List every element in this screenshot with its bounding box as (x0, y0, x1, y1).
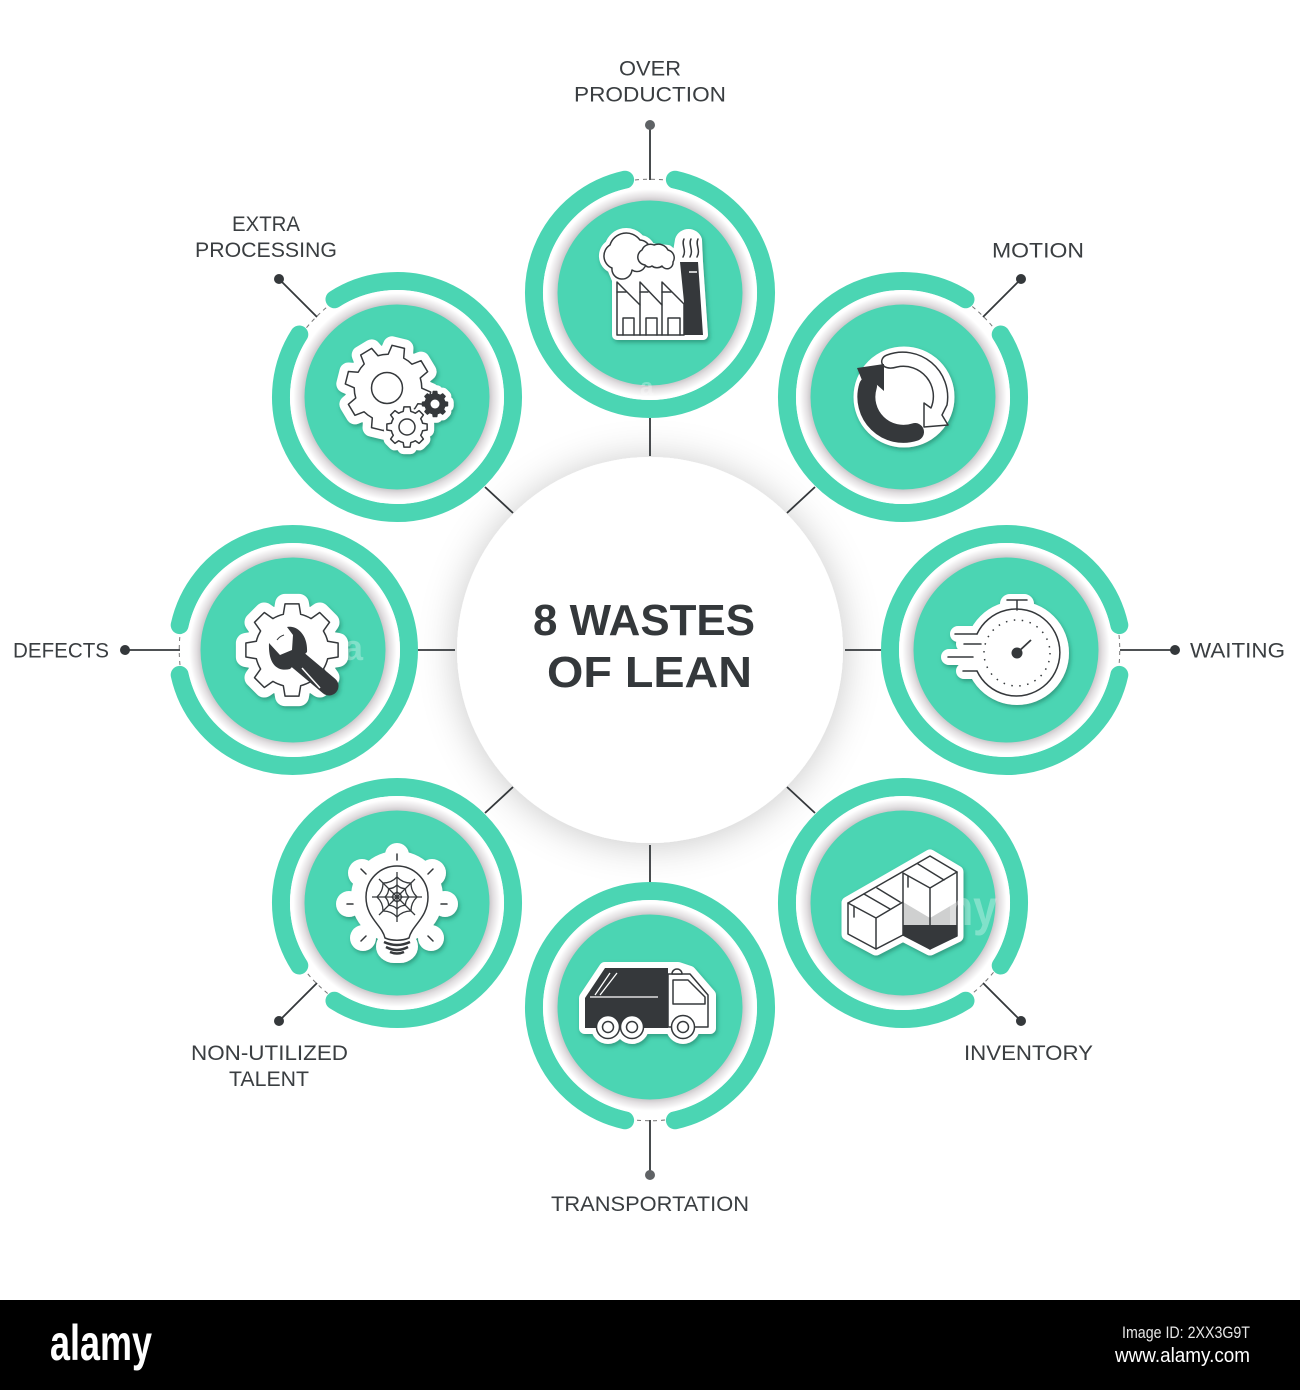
icon: stopwatch (945, 597, 1065, 701)
pointer: waiting (1120, 645, 1180, 655)
label: motion: MOTION (992, 240, 1084, 262)
footer url: www.alamy.com (1114, 1345, 1250, 1367)
watermark fragment: a (640, 374, 654, 401)
pointer: motion (983, 274, 1026, 317)
node: over production (534, 179, 766, 409)
icon: stacked boxes (848, 856, 957, 949)
pointer: non-utilized talent (274, 983, 317, 1026)
footer logo: alamy (50, 1315, 152, 1371)
title: OF LEAN (547, 648, 752, 697)
label: extra processing: EXTRA (232, 213, 300, 236)
title: 8 WASTES (533, 596, 755, 645)
ring and disc: motion (739, 235, 1065, 561)
node: defects (179, 534, 409, 766)
node: inventory (739, 739, 1065, 1065)
label: over production: PRODUCTION (574, 84, 726, 106)
hub connector lines (417, 418, 883, 882)
central hub circle (457, 457, 843, 843)
node: non-utilized talent (235, 739, 561, 1065)
label: non-utilized talent (191, 1042, 348, 1091)
icon: cycle arrows (857, 351, 950, 443)
label: inventory: INVENTORY (964, 1042, 1093, 1065)
pointer: inventory (983, 983, 1026, 1026)
node: extra processing (235, 235, 561, 561)
ring and disc: extra processing (235, 235, 561, 561)
label: extra processing: PROCESSING (195, 239, 337, 262)
ring and disc: defects (179, 534, 409, 766)
label: waiting: WAITING (1190, 640, 1285, 662)
node: transportation (534, 891, 766, 1121)
ring and disc: over production (534, 179, 766, 409)
watermark fragment: ny (947, 880, 997, 936)
pointer: extra processing (274, 274, 317, 317)
node: motion (739, 235, 1065, 561)
label: transportation: TRANSPORTATION (551, 1193, 749, 1216)
icon: factory (604, 233, 703, 335)
ring and disc: non-utilized talent (235, 739, 561, 1065)
footer bar (0, 1300, 1300, 1390)
icon: gear with wrench (246, 604, 338, 696)
pointer: over production (645, 120, 655, 180)
icon: garbage truck (585, 968, 710, 1040)
ring and disc: transportation (534, 891, 766, 1121)
icon: gears (337, 337, 448, 447)
label: over production (574, 58, 726, 106)
footer image id: Image ID: 2XX3G9T (1122, 1323, 1250, 1342)
icon: light bulb with cobweb (336, 843, 458, 963)
ring and disc: waiting (890, 534, 1120, 766)
label: extra processing (195, 213, 337, 262)
label: non-utilized talent: NON-UTILIZED (191, 1042, 348, 1065)
pointer: transportation (645, 1120, 655, 1180)
title (533, 596, 755, 697)
label: defects: DEFECTS (13, 640, 109, 662)
node: waiting (890, 534, 1120, 766)
label: non-utilized talent: TALENT (229, 1068, 309, 1091)
label: over production: OVER (619, 58, 681, 80)
watermark fragment: a (343, 627, 364, 668)
ring and disc: inventory (739, 739, 1065, 1065)
pointer: defects (120, 645, 180, 655)
